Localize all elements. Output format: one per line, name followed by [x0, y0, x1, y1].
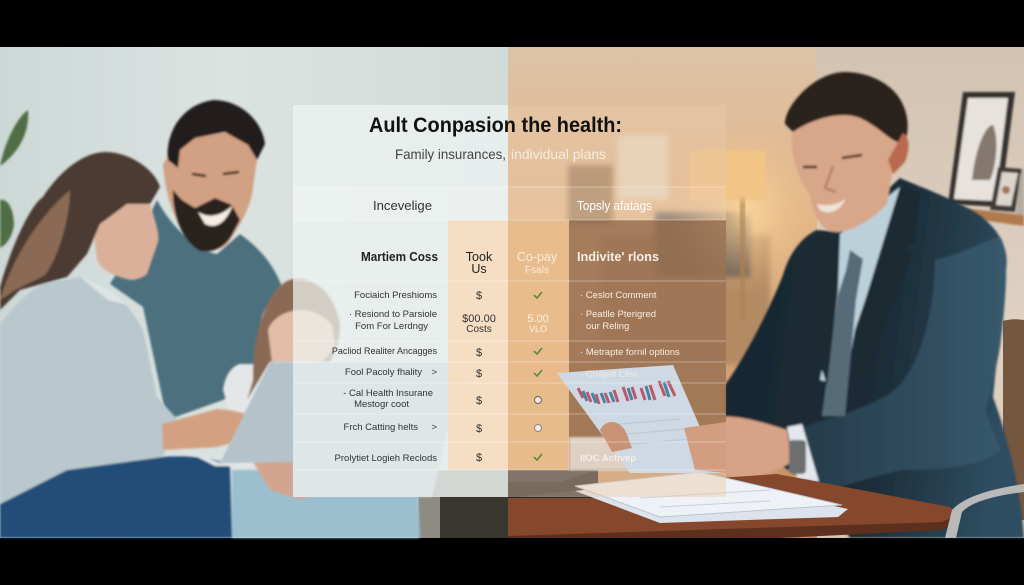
- column headers: Us: [471, 262, 487, 276]
- person: child: [223, 279, 420, 538]
- title: Ault Conpasion the health:: [369, 114, 622, 137]
- column headers: Indivite' rlons: [577, 250, 659, 264]
- background: family side: [0, 47, 508, 538]
- co-pay values: VLO: [529, 324, 547, 334]
- column headers: Fsals: [525, 265, 549, 276]
- person: man in suit: [700, 72, 1024, 538]
- individual plan items: · Metrapte fornil options: [580, 347, 680, 358]
- column headers: Co-pay: [517, 250, 558, 264]
- family cost values: $: [476, 368, 482, 380]
- documents on desk: [575, 472, 848, 523]
- feature rows: Fociaich Preshioms: [354, 290, 437, 301]
- feature rows: Prolytiet Logieh Reclods: [335, 453, 437, 464]
- feature rows: [332, 290, 437, 464]
- feature rows: Fool Pacoly fhality: [345, 367, 422, 378]
- picture frames and shelf: [948, 92, 1024, 226]
- chart paper: [557, 365, 726, 473]
- tablet: [220, 362, 472, 497]
- panel tint: [293, 105, 508, 497]
- co-pay values: [527, 292, 549, 460]
- column headers: [361, 250, 659, 276]
- chair back: [1003, 319, 1024, 520]
- row lines: [293, 187, 726, 470]
- family cost values: $: [476, 395, 482, 407]
- section headers: Topsly afatags: [577, 199, 652, 213]
- desk: [508, 470, 1024, 538]
- feature rows: >: [431, 422, 437, 433]
- paper under chart: [569, 437, 640, 470]
- family cost values: $: [476, 290, 482, 302]
- column: individual plans: [569, 220, 726, 470]
- feature rows: · Resiond to Parsiole: [349, 309, 437, 320]
- individual plan items: · Chapot Lliss: [580, 369, 638, 380]
- feature rows: Mestogr coot: [354, 399, 409, 410]
- feature rows: - Cal Health Insurane: [343, 388, 433, 399]
- individual plan items: IIOC Activep: [580, 453, 636, 464]
- individual plan items: [580, 290, 680, 464]
- section headers: Incevelige: [373, 199, 432, 213]
- subtitle: individual plans: [511, 146, 606, 162]
- column headers: Took: [466, 250, 493, 264]
- family cost values: Costs: [466, 324, 492, 335]
- family cost values: $: [476, 452, 482, 464]
- feature rows: Frch Catting helts: [344, 422, 418, 433]
- column: family cost: [448, 220, 508, 470]
- individual plan items: · Ceslot Comment: [580, 290, 657, 301]
- family cost values: [462, 290, 496, 464]
- person: woman: [0, 152, 337, 538]
- subtitle: Family insurances,: [395, 146, 506, 162]
- column: co-pay: [508, 220, 569, 470]
- section headers: [373, 199, 652, 213]
- family cost values: $00.00: [462, 313, 496, 325]
- column headers: Martiem Coss: [361, 250, 438, 264]
- family cost values: $: [476, 347, 482, 359]
- comparison table panel: [293, 105, 726, 497]
- feature rows: Pacliod Realiter Ancagges: [332, 346, 437, 356]
- individual plan items: · Peatlle Pterigred: [580, 309, 656, 320]
- person: man with family: [110, 100, 282, 420]
- subtitle: [395, 146, 606, 162]
- family cost values: $: [476, 423, 482, 435]
- feature rows: >: [431, 367, 437, 378]
- background: individual side: [508, 47, 1024, 538]
- feature rows: Fom For Lerdngy: [355, 321, 428, 332]
- co-pay values: 5.00: [527, 313, 549, 325]
- individual plan items: our Reling: [586, 321, 629, 332]
